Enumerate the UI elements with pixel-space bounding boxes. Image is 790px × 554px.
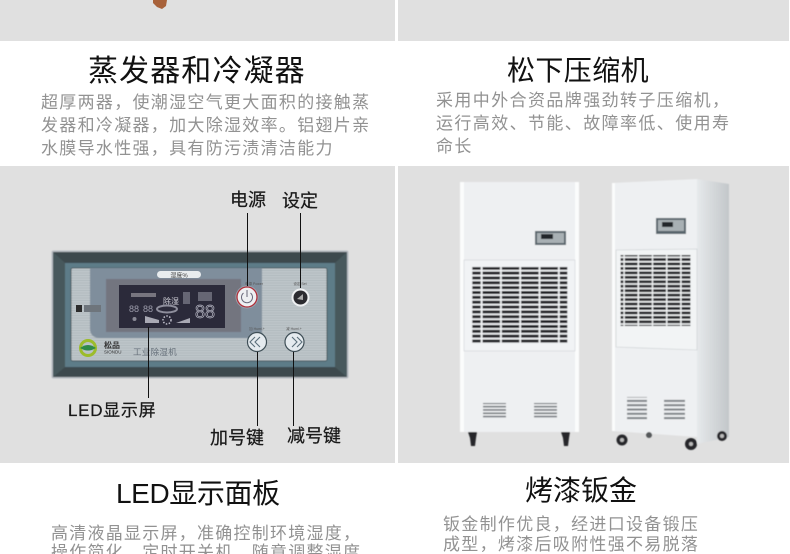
controller (656, 218, 686, 234)
control panel frame (52, 250, 348, 378)
set button: 设定 Set (293, 281, 307, 286)
callout: power (230, 190, 266, 286)
panel: top right image strip (398, 0, 789, 41)
humidity badge: 湿度% (170, 271, 188, 279)
icon: copper pipe fragment (153, 0, 167, 9)
brand mark: 工业除湿机 (133, 347, 177, 357)
bottom vents (483, 403, 506, 419)
callout: LED screen: LED显示屏 (68, 401, 156, 420)
text block: LED panel description (51, 524, 361, 554)
LCD screen: 88 (143, 304, 153, 314)
text block: compressor description: 采用中外合资品牌强劲转子压缩机， (436, 91, 730, 110)
callout: set (282, 191, 318, 288)
LCD screen (119, 285, 225, 328)
minus button (285, 326, 304, 352)
casters (616, 434, 628, 446)
text block: sheet metal description (443, 515, 699, 554)
brand mark (76, 305, 177, 357)
LCD screen: 88 (195, 302, 215, 322)
callout: LED screen (68, 327, 156, 420)
dehumidifier angled view (612, 179, 729, 450)
bottom vents (627, 397, 647, 420)
power button: 电源 Power (245, 281, 264, 286)
plus button: 加 Humi.+ (249, 326, 265, 331)
text block: compressor description: 命长 (436, 137, 473, 156)
callout: plus key (210, 352, 264, 448)
humidity badge (157, 271, 201, 279)
panel: dehumidifier image (398, 166, 789, 463)
text block: LED panel description: 高清液晶显示屏，准确控制环境湿度， (51, 524, 361, 543)
text block: compressor description (436, 91, 730, 156)
LCD screen: 除湿 (163, 296, 179, 306)
LCD screen: 88 (129, 304, 139, 314)
callout: minus key: 减号键 (287, 426, 341, 446)
brand mark: SIONDU (104, 350, 122, 354)
set button (292, 281, 310, 306)
text block: evaporator description (41, 92, 370, 158)
dehumidifier front view (460, 182, 579, 446)
callout: set: 设定 (282, 191, 318, 211)
casters (468, 432, 477, 446)
plus button (248, 326, 266, 352)
callout: power: 电源 (230, 190, 266, 210)
minus button: 减 Humi.+ (286, 326, 302, 331)
callout: plus key: 加号键 (210, 428, 264, 448)
controller (535, 231, 566, 245)
panel: top left image strip (0, 0, 395, 41)
heading: baked paint sheet metal: 烤漆钣金 (525, 475, 637, 506)
callout: minus key (287, 352, 341, 446)
power button (236, 281, 264, 308)
text block: evaporator description: 超厚两器，使潮湿空气更大面积的接触蒸 (41, 92, 370, 112)
heading: LED display panel: LED显示面板 (116, 478, 280, 509)
heading: Panasonic compressor: 松下压缩机 (507, 55, 649, 86)
text block: compressor description: 运行高效、节能、故障率低、使用寿 (436, 113, 730, 133)
text block: sheet metal description: 成型，烤漆后吸附性强不易脱落 (443, 535, 699, 554)
text block: evaporator description: 发器和冷凝器，加大除湿效率。铝翅片亲 (41, 116, 370, 135)
brand mark: 松品 (104, 340, 120, 350)
text block: sheet metal description: 钣金制作优良，经进口设备锻压 (443, 515, 699, 534)
panel: LED control panel image (0, 166, 395, 463)
heading: evaporator and condenser: 蒸发器和冷凝器 (88, 55, 306, 88)
text block: evaporator description: 水膜导水性强，具有防污渍清洁能力 (41, 139, 334, 158)
